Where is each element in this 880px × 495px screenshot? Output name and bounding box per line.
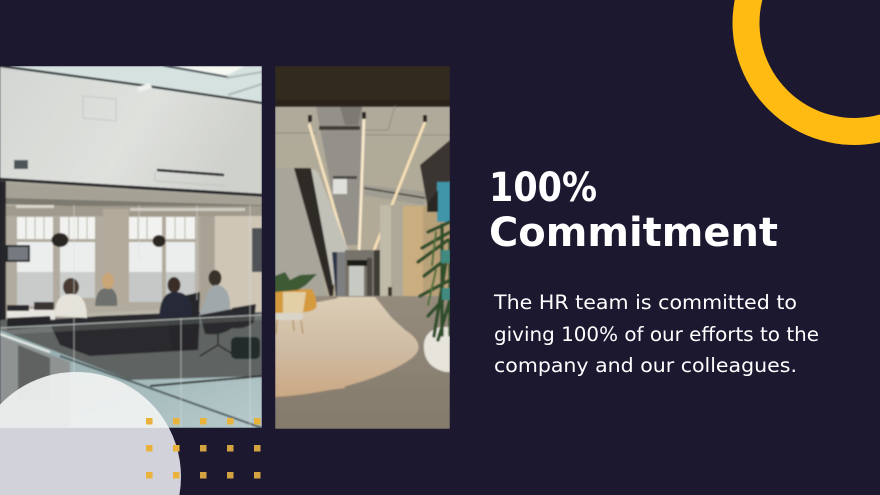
- far corridor: [345, 250, 380, 300]
- yellow ring: [733, 0, 880, 145]
- skylight: [0, 65, 262, 105]
- meeting table and people: [7, 270, 260, 359]
- person: white top: [55, 278, 87, 318]
- ceiling: [275, 106, 450, 297]
- carpet: [275, 296, 450, 429]
- polished floor: [275, 297, 418, 397]
- decorative semi-circle: [0, 372, 181, 495]
- person: grey sweater: [199, 270, 230, 316]
- white pot: [424, 327, 450, 372]
- person: dark suit: [159, 277, 192, 318]
- glass panels: [0, 205, 262, 428]
- potted plant: [418, 222, 450, 340]
- body text: company and our colleagues.: [494, 354, 797, 377]
- body text: The HR team is committed to: [493, 291, 797, 314]
- photo: concrete office corridor: [275, 66, 450, 429]
- title: Commitment: [489, 210, 778, 256]
- person: woman in grey: [95, 273, 117, 306]
- dot grid: [146, 418, 260, 478]
- wall details: [14, 83, 226, 186]
- sofa, plants and chair: [275, 272, 317, 334]
- upper wall: [0, 68, 262, 196]
- title: 100%: [489, 165, 597, 211]
- body text: giving 100% of our efforts to the: [494, 323, 819, 346]
- lower glass floor: [0, 312, 262, 428]
- tv and lamps: [6, 228, 262, 272]
- title: [489, 165, 778, 256]
- photo: glass-walled meeting room: [0, 65, 262, 428]
- lights: [308, 112, 427, 255]
- back room: [0, 181, 262, 331]
- right walls: [379, 180, 450, 297]
- windows: [17, 217, 195, 306]
- body text: [493, 291, 819, 377]
- chairs: [200, 304, 260, 359]
- left concrete wall and beam: [275, 168, 348, 312]
